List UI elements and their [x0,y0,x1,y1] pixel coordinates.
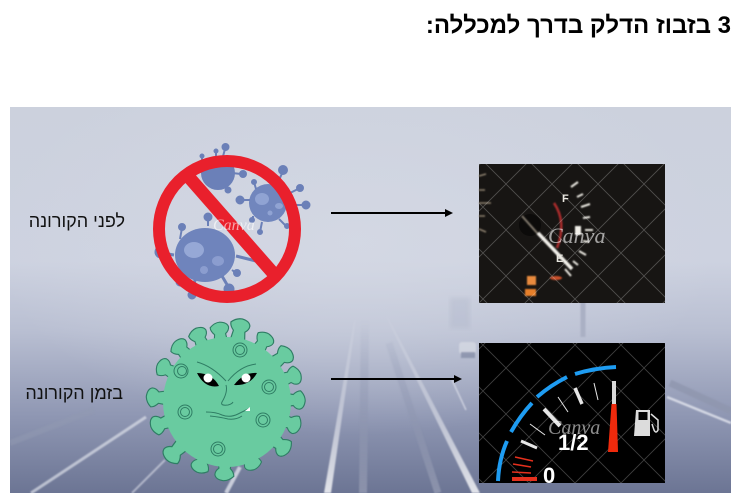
arrow: before corona to gauge [331,209,453,217]
illustration: fuel gauge during corona [479,343,665,488]
icon: angry green virus [146,317,305,481]
gauge label zero: 0 [543,463,555,488]
gauge label half: 1/2 [558,430,589,455]
gauge letters: F [562,193,569,205]
left cluster ticks [479,174,491,232]
pores [174,343,276,456]
prohibition sign [159,161,295,297]
watermark: Canva [548,417,600,439]
label: before corona: לפני הקורונה [29,211,125,231]
eyes [197,373,219,386]
icon: fuel pump [634,410,658,436]
background photo: foggy highway [10,107,731,493]
label: during corona: בזמן הקורונה [25,383,123,403]
needle [522,216,538,234]
watermark: Canva [548,223,605,248]
icon: blue viruses crossed out [156,144,310,298]
virus: top [200,144,246,192]
brows, nose and mouth [197,362,256,419]
spikes [146,317,305,481]
red arc [554,203,561,248]
body [163,337,291,467]
watermark: Canva [213,217,255,234]
tick marks [521,383,598,448]
arrow: during corona to gauge [331,375,462,383]
virus: bottom left [156,214,256,298]
warning lights [527,276,536,285]
virus: right [236,166,310,234]
photo: fuel gauge before corona: E [556,253,563,265]
blue arc segments [498,367,616,481]
ticks [571,182,593,265]
red ticks [512,457,537,479]
photo: fuel gauge before corona [479,164,665,303]
title: 3 בזבוז הדלק בדרך למכללה: [426,12,731,39]
fuel level bar [608,381,618,452]
